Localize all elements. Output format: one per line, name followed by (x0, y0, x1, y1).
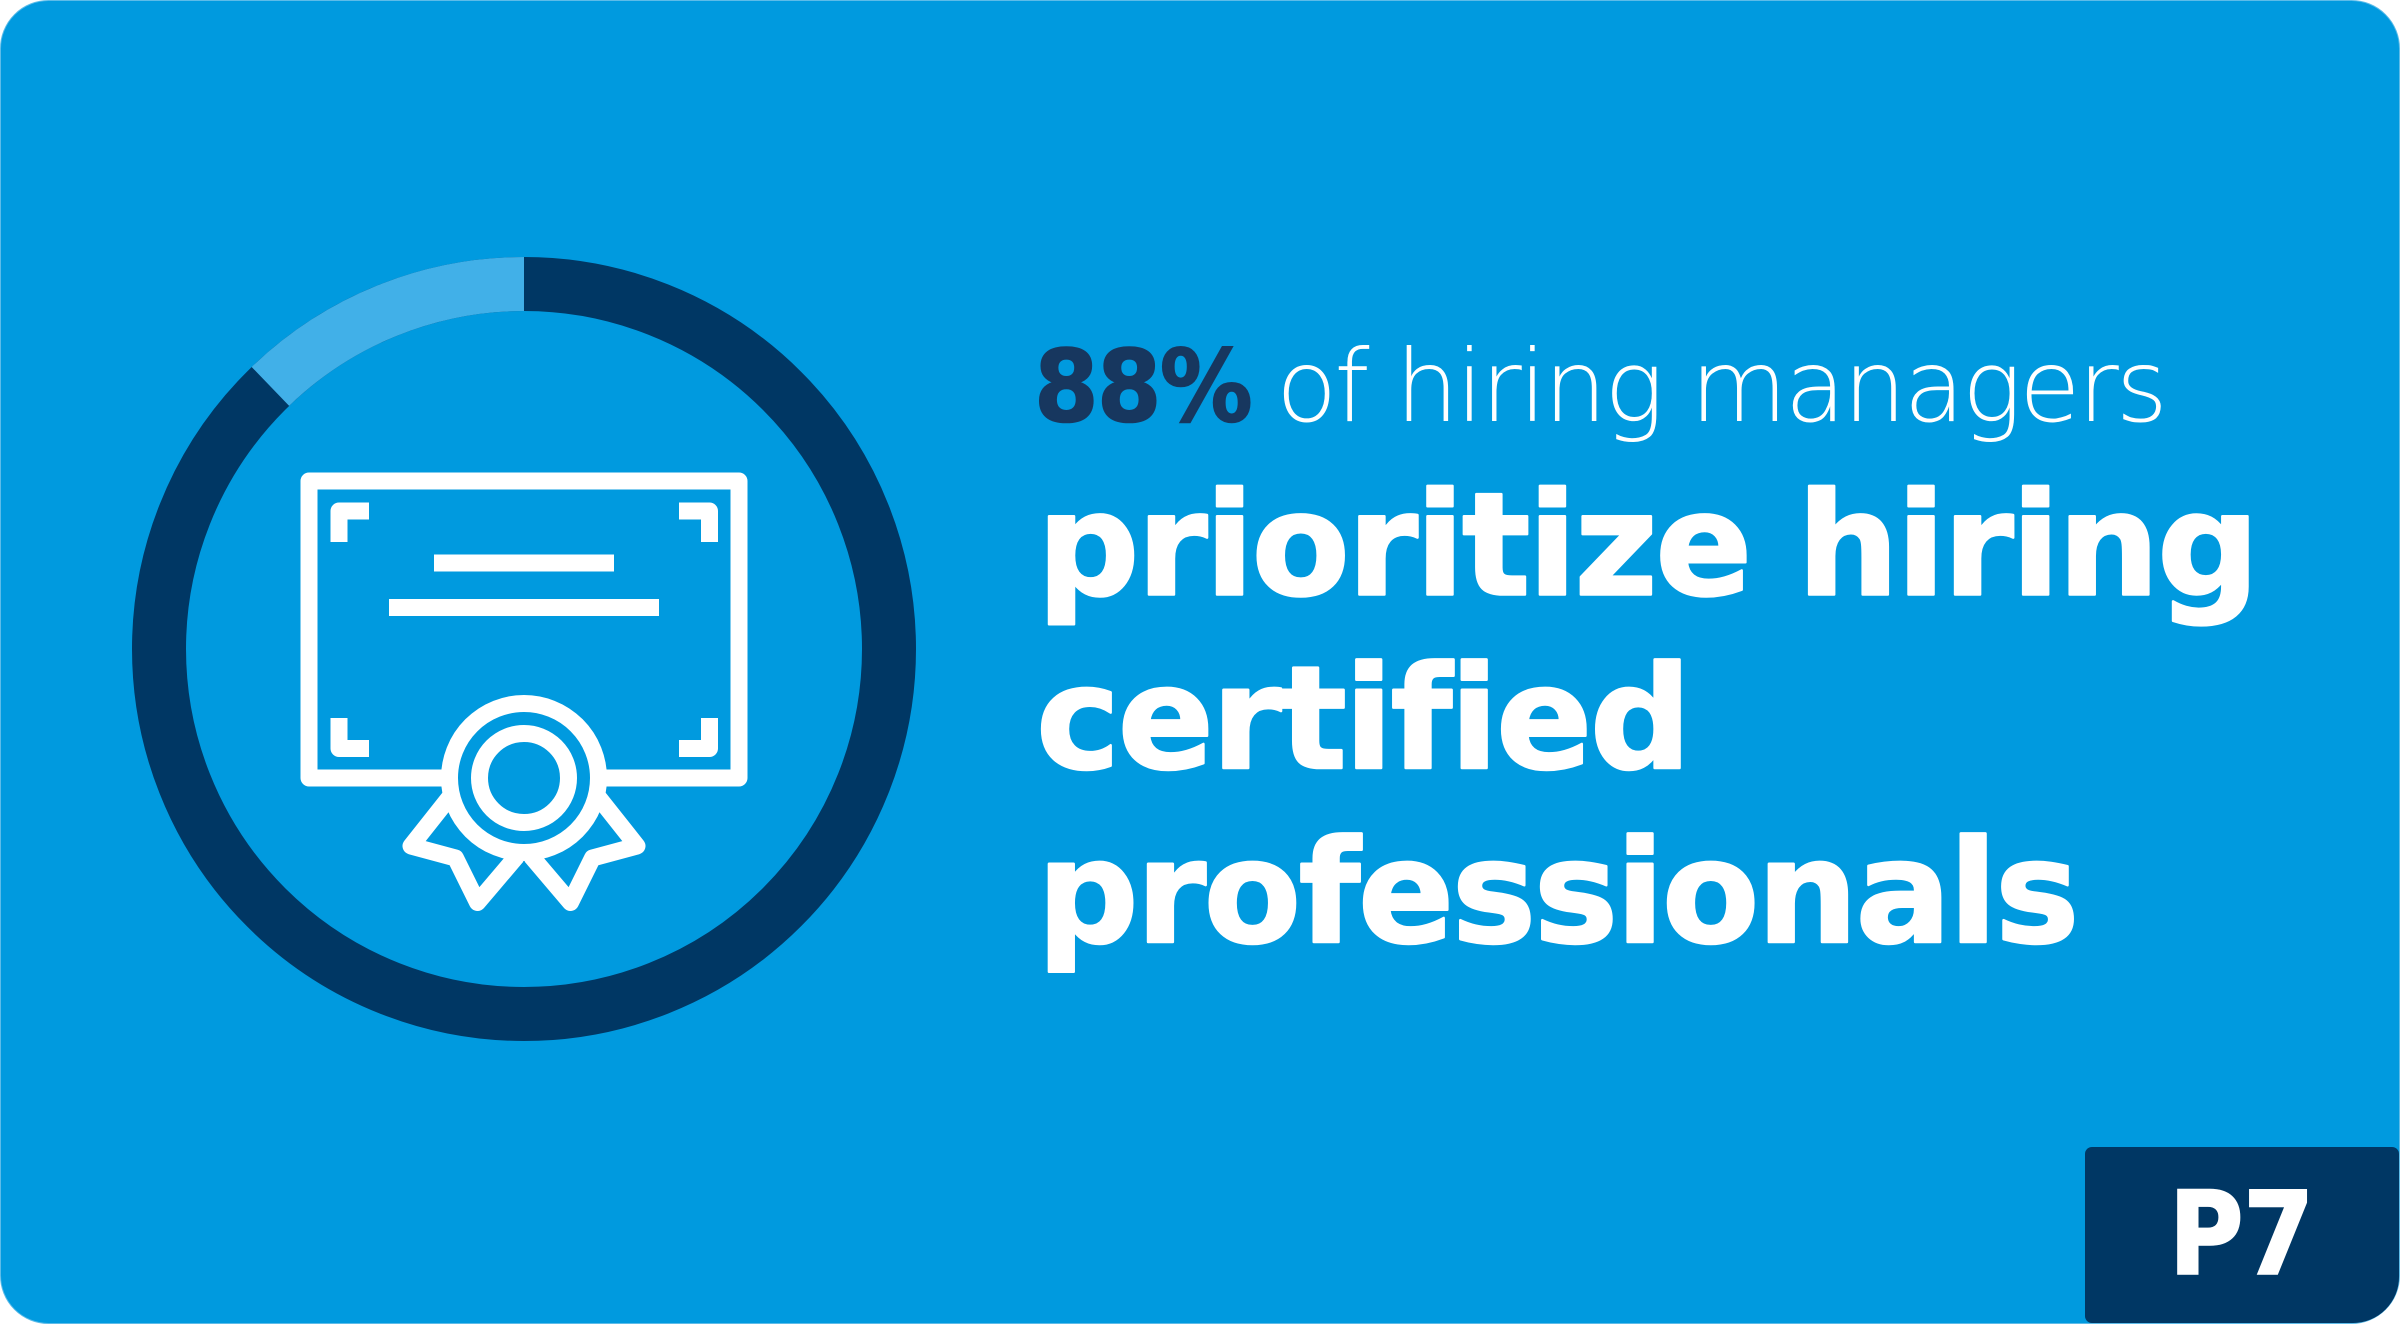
heading: prioritize hiring certified professionals: prioritize hiring (1037, 462, 2257, 628)
badge: page number P7 (2085, 1147, 2399, 1323)
heading: prioritize hiring certified professionals: professionals (1037, 809, 2077, 976)
badge: page number P7: P7 (2169, 1168, 2314, 1300)
donut chart: 88 percent (159, 284, 889, 1014)
certificate corner marks (339, 511, 710, 748)
statistic: 88%: 88% (1034, 328, 1251, 445)
icon: certificate with ribbon seal (309, 481, 739, 902)
text: of hiring managers: of hiring managers (1276, 328, 2165, 445)
certificate frame (309, 481, 739, 778)
heading: prioritize hiring certified professionals (1036, 462, 2257, 976)
certificate text lines (389, 563, 659, 608)
seal ribbons (411, 798, 637, 902)
seal rings (450, 704, 598, 852)
heading: prioritize hiring certified professionals: certified (1036, 635, 1689, 802)
